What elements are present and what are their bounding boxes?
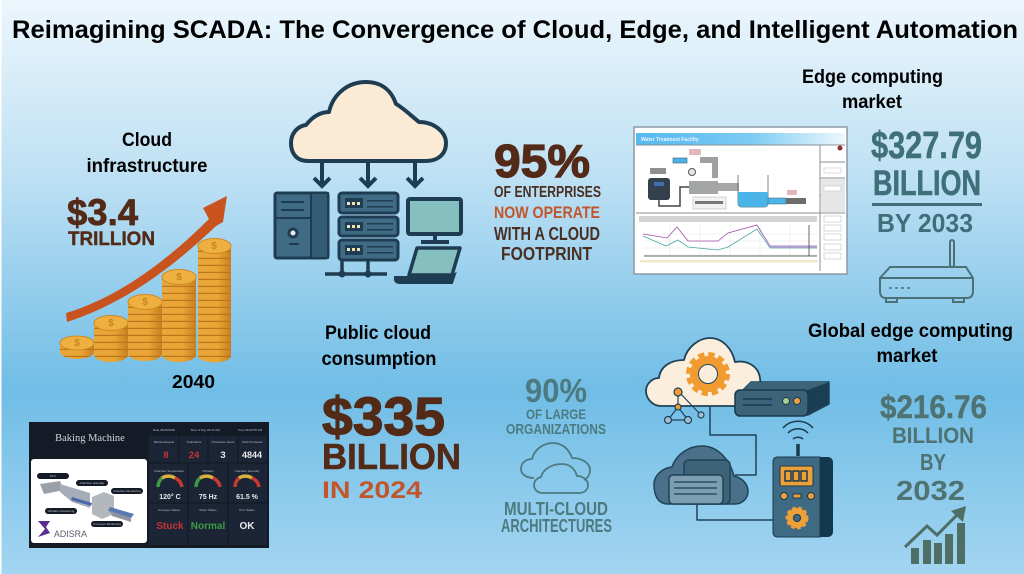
chart toolbar bbox=[639, 216, 817, 222]
coin stack 1 bbox=[60, 336, 94, 359]
stat: 95% of enterprises bbox=[494, 135, 601, 264]
panel: baking machine dashboard: Date 05/26/2025 bbox=[153, 428, 175, 432]
stat: $216.76 billion by 2032: BY bbox=[920, 449, 946, 475]
icon: edge devices and clouds bbox=[646, 338, 833, 537]
lower cloud bbox=[654, 446, 748, 504]
stat: $216.76 billion by 2032: $216.76 bbox=[880, 389, 987, 425]
arrow: growth bbox=[66, 196, 227, 322]
panel: baking machine dashboard: OK bbox=[240, 521, 255, 532]
chart: rising coin stacks: $ bbox=[142, 297, 148, 308]
machine image card: PLC bbox=[50, 474, 57, 478]
panel: baking machine dashboard: Blocked Assets bbox=[154, 440, 175, 444]
chart: rising coin stacks: $ bbox=[74, 338, 80, 349]
panel: baking machine dashboard bbox=[29, 422, 269, 548]
panel: baking machine dashboard: Time 08:00:55 AM bbox=[238, 428, 263, 432]
heading: edge computing market: Edge computing bbox=[802, 67, 943, 88]
stat: $3.4 trillion: TRILLION bbox=[68, 229, 155, 250]
panel: water treatment SCADA screen bbox=[634, 127, 847, 274]
gauges bbox=[158, 476, 259, 487]
panel: baking machine dashboard: Chamber Temperature bbox=[154, 469, 184, 473]
machine image card: Chamber Humidity bbox=[80, 481, 105, 485]
dashboard tiles bbox=[149, 436, 267, 545]
panel: baking machine dashboard: 75 Hz bbox=[199, 494, 218, 501]
stat: $335 billion in 2024 bbox=[322, 387, 461, 504]
heading: cloud infrastructure: Cloud bbox=[122, 129, 172, 151]
icon: cloud with computers bbox=[275, 82, 461, 283]
chart: rising coin stacks: $ bbox=[176, 272, 182, 283]
heading: cloud infrastructure: infrastructure bbox=[86, 155, 208, 177]
laptop bbox=[409, 248, 460, 275]
connectors bbox=[697, 406, 775, 520]
panel: baking machine dashboard: Stuck bbox=[156, 521, 184, 532]
heading: public cloud consumption: Public cloud bbox=[325, 322, 431, 344]
panel: baking machine dashboard: Motor Status bbox=[199, 508, 217, 512]
coin stack 4 bbox=[162, 270, 196, 362]
stat: $335 billion in 2024: BILLION bbox=[322, 436, 461, 477]
stat: $216.76 billion by 2032 bbox=[880, 389, 987, 506]
panel: baking machine dashboard: 61.5 % bbox=[236, 494, 259, 501]
chart: rising coin stacks bbox=[60, 238, 231, 362]
machine image card: Conveyor Monitoring bbox=[93, 522, 121, 526]
panel: baking machine dashboard: 24 bbox=[189, 450, 200, 461]
panel: baking machine dashboard: Units Produced bbox=[242, 440, 263, 444]
coin stack 3 bbox=[128, 294, 162, 361]
stat: $327.79 billion by 2033: BILLION bbox=[873, 164, 981, 203]
machine image card bbox=[31, 459, 147, 543]
network nodes bbox=[664, 388, 704, 424]
stat: $3.4 trillion bbox=[67, 192, 155, 250]
chart: rising coin stacks: $ bbox=[211, 241, 217, 252]
stat: 95% of enterprises: 95% bbox=[494, 135, 590, 187]
stat: $335 billion in 2024: $335 bbox=[322, 387, 445, 447]
monitor bbox=[408, 199, 461, 234]
stat: $3.4 trillion: $3.4 bbox=[67, 192, 138, 233]
heading: cloud infrastructure bbox=[86, 129, 208, 177]
stat: 90% multi-cloud: OF LARGE bbox=[526, 407, 586, 422]
panel: baking machine dashboard: 120° C bbox=[159, 493, 181, 501]
stat: $327.79 billion by 2033: BY 2033 bbox=[877, 208, 973, 238]
icon: growth chart bbox=[905, 506, 966, 564]
panel: baking machine dashboard: Baking Machine bbox=[55, 433, 125, 444]
top cloud bbox=[646, 338, 760, 406]
panel: baking machine dashboard: Chamber Humidity bbox=[235, 469, 260, 473]
tank bbox=[738, 175, 768, 207]
panel: baking machine dashboard: 4844 bbox=[242, 450, 262, 460]
heading: global edge computing market bbox=[808, 321, 1013, 367]
network base bbox=[325, 260, 387, 274]
stat: 95% of enterprises: FOOTPRINT bbox=[501, 244, 592, 264]
panel: baking machine dashboard: Production Alerts bbox=[212, 440, 235, 444]
panel: baking machine dashboard: Vibration bbox=[202, 469, 214, 473]
cloud bbox=[291, 82, 446, 161]
panel: baking machine dashboard: PLC Status bbox=[239, 508, 255, 512]
stat: 95% of enterprises: NOW OPERATE bbox=[494, 203, 600, 222]
handheld device bbox=[773, 457, 833, 537]
panel: baking machine dashboard: 8 bbox=[163, 450, 169, 461]
heading: public cloud consumption: consumption bbox=[322, 348, 436, 370]
stat: 90% multi-cloud: 90% bbox=[525, 372, 587, 409]
server box bbox=[735, 382, 829, 415]
coin stack 2 bbox=[94, 316, 128, 362]
heading: edge computing market bbox=[802, 67, 943, 113]
gear bbox=[690, 356, 726, 392]
machine image card: ADISRA bbox=[54, 529, 87, 539]
panel: baking machine dashboard: Total Alerts bbox=[187, 440, 202, 444]
stat: $216.76 billion by 2032: 2032 bbox=[896, 475, 965, 506]
heading: global edge computing market: Global edge computing bbox=[808, 321, 1013, 342]
panel: baking machine dashboard: Conveyor Status bbox=[158, 508, 181, 512]
heading: public cloud consumption bbox=[322, 322, 436, 370]
heading: global edge computing market: market bbox=[876, 346, 938, 367]
heading: edge computing market: market bbox=[842, 92, 903, 113]
icon: router bbox=[880, 240, 973, 302]
desktop tower bbox=[275, 193, 328, 258]
machine image card: Chamber Monitoring bbox=[113, 489, 141, 493]
stat: 90% multi-cloud bbox=[501, 372, 612, 536]
server rack bbox=[339, 193, 398, 260]
label: 2040: 2040 bbox=[172, 372, 215, 392]
stat: 90% multi-cloud: MULTI-CLOUD bbox=[504, 499, 608, 519]
arrows bbox=[314, 162, 423, 187]
panel: baking machine dashboard: Normal bbox=[191, 521, 225, 532]
title: Reimagining SCADA: The Convergence of Cloud, Edge, and Intelligent Automation bbox=[12, 16, 1018, 44]
machine image card: Vibration Monitoring bbox=[48, 509, 75, 513]
stat: 90% multi-cloud: ORGANIZATIONS bbox=[506, 422, 606, 438]
icon: multi-cloud bbox=[521, 443, 590, 493]
stat: 90% multi-cloud: ARCHITECTURES bbox=[501, 516, 612, 536]
chart: rising coin stacks: $ bbox=[108, 318, 114, 329]
coin stack 5 bbox=[198, 238, 231, 362]
stat: $327.79 billion by 2033: $327.79 bbox=[871, 125, 982, 167]
buttons bbox=[824, 216, 841, 259]
stat: $327.79 billion by 2033 bbox=[802, 67, 982, 238]
stat: 95% of enterprises: OF ENTERPRISES bbox=[494, 184, 601, 201]
panel: baking machine dashboard: Time of Day 09:14 AM bbox=[190, 428, 220, 432]
stat: $335 billion in 2024: IN 2024 bbox=[322, 477, 423, 504]
line chart bbox=[643, 224, 817, 256]
panel: baking machine dashboard: 3 bbox=[220, 450, 226, 461]
stat: 95% of enterprises: WITH A CLOUD bbox=[494, 224, 600, 244]
panel: water treatment SCADA screen: Water Treatment Facility bbox=[641, 137, 699, 143]
process diagram bbox=[673, 158, 687, 163]
stat: $216.76 billion by 2032: BILLION bbox=[892, 423, 974, 448]
